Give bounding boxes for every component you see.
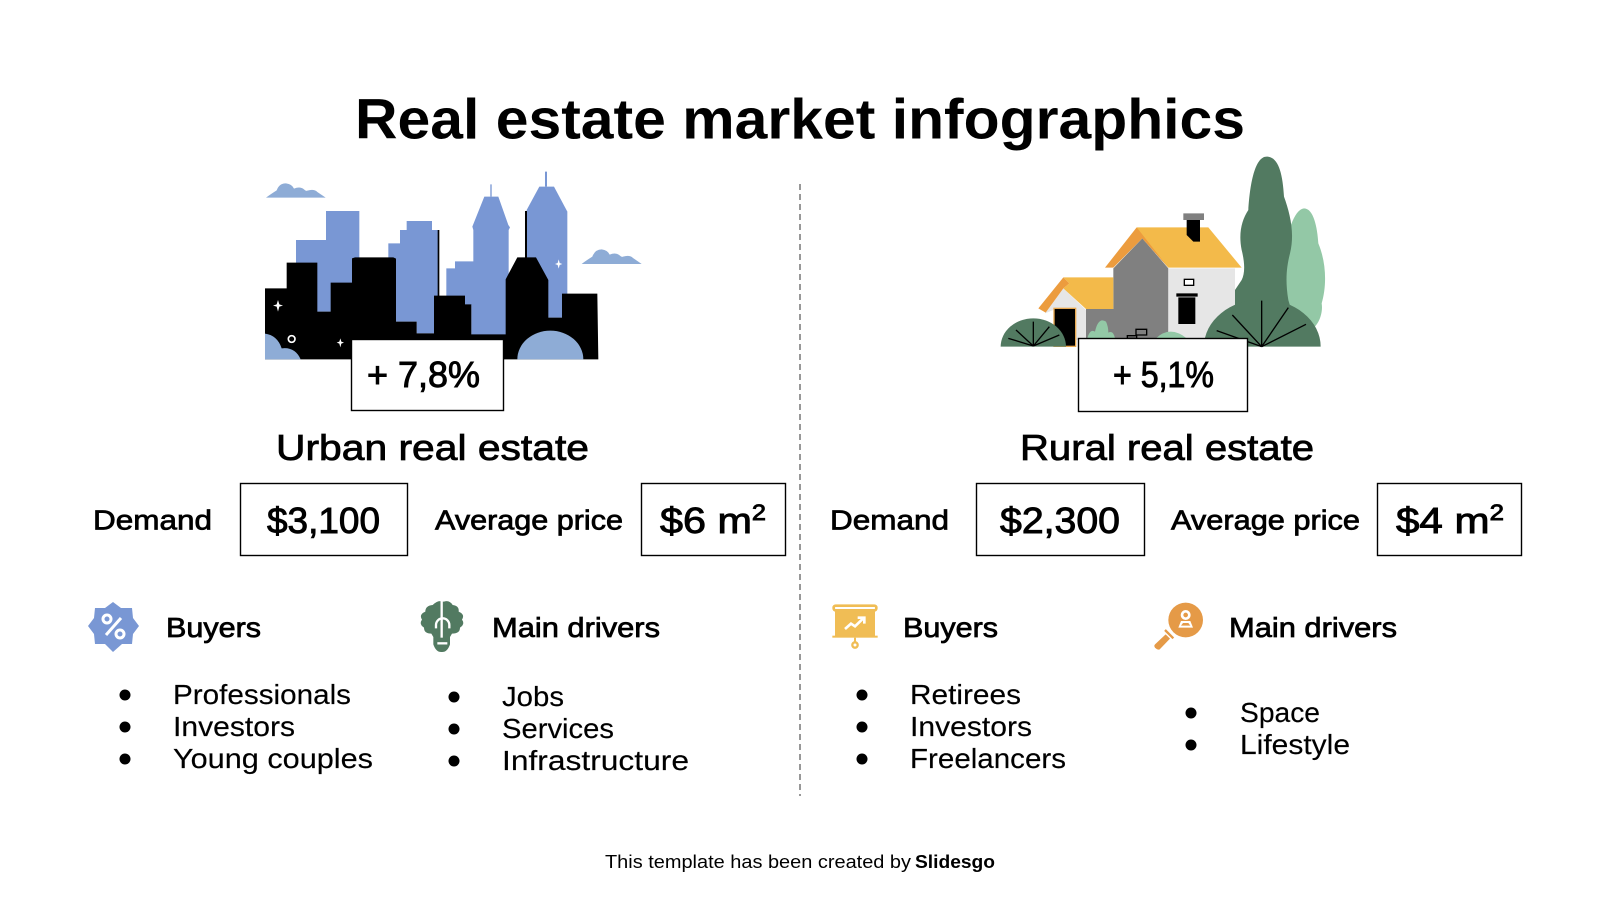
urban average price label: Average price <box>435 504 623 536</box>
list: rural main drivers: Space <box>1240 697 1320 728</box>
list: rural main drivers <box>1186 697 1350 760</box>
list: urban buyers: Professionals <box>173 679 351 710</box>
footer credit: This template has been created by <box>605 852 911 872</box>
urban average price value: 2 <box>752 500 766 525</box>
badge: rural growth: + 5,1% <box>1113 354 1214 395</box>
list: rural buyers: Freelancers <box>910 743 1066 774</box>
heading: urban main drivers: Main drivers <box>492 612 660 643</box>
list: urban main drivers <box>448 681 689 776</box>
list: rural buyers: Investors <box>910 711 1032 742</box>
illustration: city skyline <box>265 172 642 359</box>
heading: urban: Urban real estate <box>276 427 589 468</box>
list: rural buyers: Retirees <box>910 679 1021 710</box>
center divider <box>799 184 801 796</box>
icon: search person <box>1154 603 1203 650</box>
rural average price value: $4 m <box>1396 500 1476 541</box>
icon: presentation board <box>832 606 878 648</box>
footer credit: Slidesgo <box>915 852 995 872</box>
heading: rural buyers: Buyers <box>903 612 998 643</box>
list: urban buyers: Investors <box>173 711 295 742</box>
list: rural main drivers: Lifestyle <box>1240 729 1350 760</box>
title: Real estate market infographics <box>355 88 1245 152</box>
heading: rural main drivers: Main drivers <box>1229 612 1397 643</box>
urban average price value: $6 m <box>660 500 740 541</box>
urban average price value <box>642 484 786 556</box>
badge: rural growth <box>1078 338 1248 412</box>
rural demand value: $2,300 <box>1000 500 1120 541</box>
list: urban buyers <box>120 679 373 774</box>
list: urban main drivers: Jobs <box>502 681 564 712</box>
list: urban buyers: Young couples <box>173 743 373 774</box>
urban demand value: $3,100 <box>267 500 380 541</box>
rural demand label: Demand <box>830 504 949 536</box>
heading: urban buyers: Buyers <box>166 612 261 643</box>
list: rural buyers <box>856 679 1066 774</box>
icon: percent badge <box>88 602 139 652</box>
urban demand value <box>240 484 408 556</box>
rural demand value <box>976 484 1144 556</box>
urban demand label: Demand <box>93 504 212 536</box>
badge: urban growth: + 7,8% <box>367 354 480 395</box>
illustration: rural house <box>1001 157 1325 347</box>
rural average price label: Average price <box>1171 504 1360 536</box>
badge: urban growth <box>352 340 504 410</box>
rural average price value <box>1378 484 1522 556</box>
rural average price value: 2 <box>1490 500 1504 525</box>
list: urban main drivers: Services <box>502 713 614 744</box>
heading: rural: Rural real estate <box>1020 427 1314 468</box>
list: urban main drivers: Infrastructure <box>502 745 689 776</box>
icon: brain bulb <box>421 601 463 652</box>
